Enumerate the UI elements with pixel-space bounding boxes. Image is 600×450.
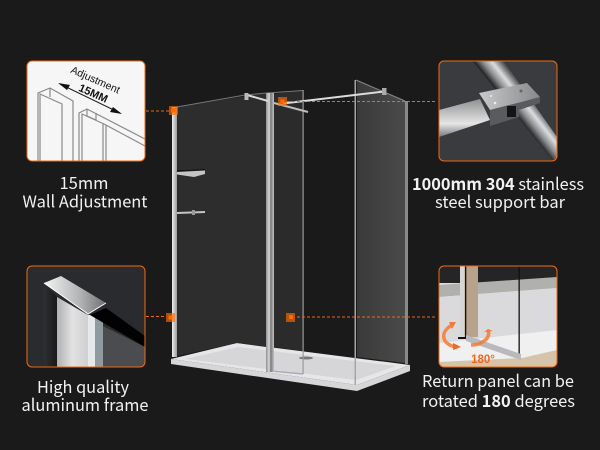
glass: [103, 326, 145, 367]
caption: wall adjustment: [22, 170, 148, 212]
bracket box: [490, 97, 540, 126]
marker: lower left: [166, 313, 175, 322]
caption: support bar: steel support bar: [435, 189, 566, 213]
glass top edges: [177, 90, 303, 107]
frame body: [57, 297, 88, 367]
panel text: adjustment: Adjustment: [69, 64, 122, 96]
panel text: 180 degrees: 180°: [471, 354, 495, 366]
shower enclosure: [171, 80, 410, 391]
frame top face: [44, 276, 106, 314]
return glass panel: [274, 90, 303, 351]
caption: support bar: 1000mm 304 stainless: [412, 171, 584, 195]
wall and tray: [439, 266, 557, 283]
left glass panel: [177, 93, 266, 356]
return panel edge: [302, 90, 304, 374]
black glass edge: [90, 308, 145, 347]
caption: aluminum frame: aluminum frame: [22, 392, 148, 416]
right wall frame: [405, 101, 408, 364]
shower tray: [171, 343, 410, 391]
lower shelf: [177, 210, 205, 215]
panel: aluminum frame: [27, 266, 145, 367]
column: [464, 266, 478, 337]
connector lines: [146, 102, 437, 317]
caption: support bar: [412, 171, 584, 213]
caption: wall adjustment: 15mm: [60, 170, 108, 194]
diagonal tube: [472, 60, 557, 161]
return panel foot rail: [272, 371, 303, 374]
caption: return panel: [422, 368, 575, 412]
panel: support bar: [439, 60, 557, 161]
caption: wall adjustment: Wall Adjustment: [22, 188, 148, 212]
marker: top centre: [278, 97, 287, 106]
mount plate: [479, 83, 540, 110]
dimension arrow: [58, 83, 122, 114]
central post: [266, 93, 274, 372]
panel text: 15MM: 15MM: [77, 82, 109, 106]
adjustment profile drawing: [38, 88, 145, 161]
support bar: [244, 88, 386, 112]
caption: return panel: Return panel can be: [422, 368, 574, 392]
marker: top left: [169, 106, 178, 115]
panel: wall adjustment: [27, 61, 145, 161]
foot rail: [466, 335, 521, 360]
panel: return panel rotation: [439, 266, 557, 367]
chrome channel: [88, 315, 95, 367]
marker: lower centre: [286, 313, 295, 322]
caption: aluminum frame: [22, 374, 148, 416]
upper shelf: [177, 170, 205, 177]
left wall frame: [172, 107, 177, 357]
right panel front edge: [354, 80, 356, 385]
caption: aluminum frame: High quality: [37, 374, 129, 398]
flat bar: [439, 99, 490, 137]
rotation arrows: [444, 325, 489, 347]
caption: return panel: rotated 180 degrees: [422, 388, 575, 412]
right glass panel: [357, 80, 405, 363]
